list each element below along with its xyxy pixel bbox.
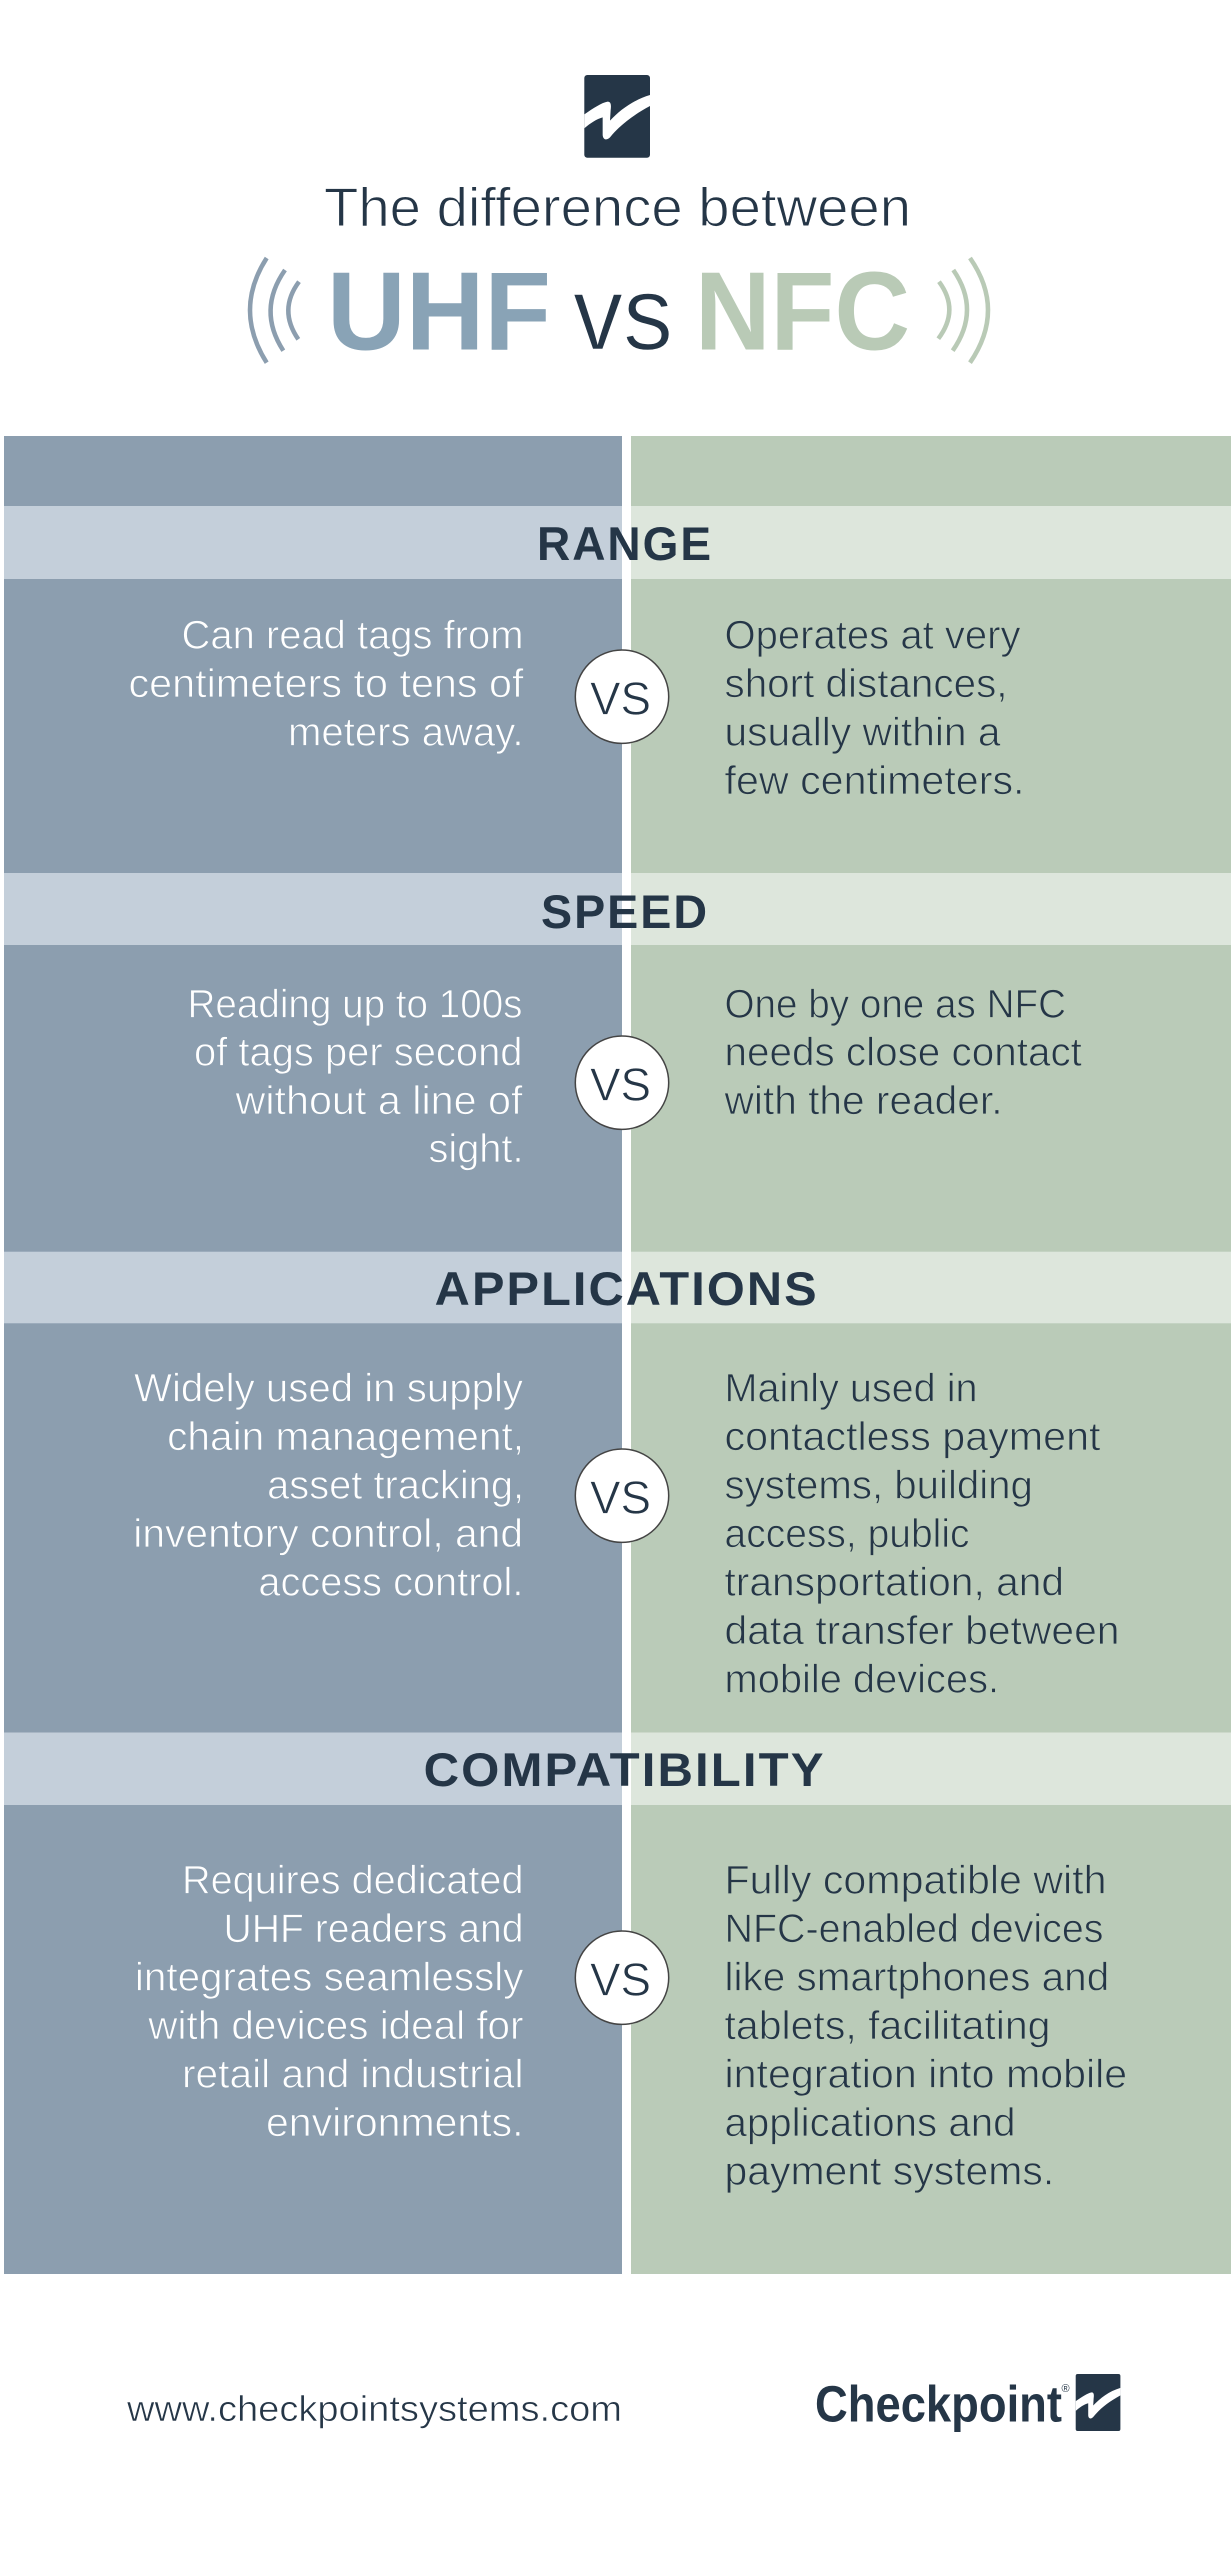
- header: [250, 75, 988, 373]
- text: NFC applications: data transfer between: [724, 1609, 1120, 1653]
- text: UHF speed: without a line of: [234, 1079, 523, 1123]
- text: UHF compatibility: environments.: [266, 2101, 524, 2145]
- text: NFC range: [724, 614, 1024, 803]
- footer: [126, 2374, 1120, 2433]
- text: UHF compatibility: retail and industrial: [182, 2052, 524, 2096]
- text: UHF compatibility: with devices ideal for: [147, 2004, 524, 2048]
- section: speed: [4, 873, 1231, 1171]
- heading band: speed: [4, 873, 1231, 945]
- heading band: range: RANGE: [537, 517, 713, 570]
- text: NFC applications: Mainly used in: [724, 1367, 978, 1411]
- text: NFC compatibility: Fully compatible with: [724, 1858, 1106, 1902]
- heading band: compatibility: [4, 1732, 1231, 1805]
- section: range: [4, 506, 1231, 803]
- text: NFC applications: systems, building: [724, 1464, 1033, 1508]
- vs badge: range: [575, 650, 669, 743]
- text: NFC applications: transportation, and: [724, 1560, 1064, 1604]
- text: UHF applications: [133, 1367, 524, 1604]
- vs badge: applications: [575, 1449, 669, 1542]
- checkpoint wordmark: Checkpoint: [815, 2376, 1062, 2433]
- text: UHF applications: chain management,: [167, 1415, 524, 1459]
- icon: right signal waves: [938, 258, 988, 363]
- text: NFC applications: [724, 1367, 1120, 1702]
- text: NFC speed: [723, 982, 1082, 1123]
- vs badge: speed: [575, 1036, 669, 1129]
- text: NFC compatibility: NFC-enabled devices: [724, 1907, 1104, 1951]
- icon: checkpoint logo small: [1076, 2374, 1120, 2431]
- text: NFC applications: contactless payment: [724, 1415, 1100, 1459]
- heading band: applications: [4, 1252, 1231, 1323]
- heading: vs: vs: [573, 255, 673, 372]
- text: NFC compatibility: applications and: [724, 2101, 1016, 2145]
- heading band: speed: SPEED: [541, 885, 709, 938]
- vs badge: compatibility: VS: [590, 1954, 651, 2006]
- text: NFC range: few centimeters.: [724, 759, 1024, 803]
- section: compatibility: [4, 1732, 1231, 2193]
- text: UHF applications: inventory control, and: [133, 1512, 523, 1556]
- checkpoint wordmark: ®: [1062, 2383, 1070, 2395]
- text: UHF range: Can read tags from: [182, 614, 524, 658]
- text: NFC compatibility: integration into mobile: [724, 2052, 1127, 2096]
- panel: NFC column background: [631, 436, 1231, 2274]
- text: UHF range: [128, 614, 524, 754]
- vs badge: range: VS: [590, 672, 651, 724]
- heading band: applications: APPLICATIONS: [435, 1262, 819, 1315]
- text: NFC applications: mobile devices.: [724, 1658, 999, 1702]
- text: NFC speed: with the reader.: [723, 1079, 1002, 1123]
- text: UHF applications: asset tracking,: [267, 1464, 524, 1508]
- website url: www.checkpointsystems.com: [126, 2388, 622, 2429]
- heading: NFC: NFC: [695, 249, 910, 373]
- vs badge: applications: VS: [590, 1472, 651, 1524]
- heading band: range: [4, 506, 1231, 579]
- vs badge: compatibility: [575, 1931, 669, 2024]
- text: NFC range: short distances,: [724, 662, 1008, 706]
- text: NFC speed: needs close contact: [724, 1031, 1082, 1075]
- text: UHF speed: [188, 982, 524, 1171]
- text: NFC range: Operates at very: [724, 614, 1020, 658]
- text: UHF range: centimeters to tens of: [128, 662, 524, 706]
- vs badge: speed: VS: [590, 1058, 651, 1110]
- section: applications: [4, 1252, 1231, 1702]
- text: UHF compatibility: UHF readers and: [224, 1907, 524, 1951]
- text: UHF range: meters away.: [288, 710, 524, 754]
- heading: UHF: UHF: [327, 249, 551, 373]
- text: UHF compatibility: [135, 1858, 524, 2145]
- text: UHF compatibility: integrates seamlessly: [135, 1955, 524, 1999]
- text: NFC compatibility: tablets, facilitating: [724, 2004, 1050, 2048]
- text: UHF applications: access control.: [258, 1560, 523, 1604]
- text: UHF speed: Reading up to 100s: [188, 982, 522, 1026]
- text: NFC compatibility: [724, 1858, 1127, 2193]
- icon: left signal waves: [250, 258, 299, 363]
- heading band: compatibility: COMPATIBILITY: [424, 1743, 826, 1796]
- text: NFC applications: access, public: [724, 1512, 970, 1556]
- panel: UHF column background: [4, 436, 622, 2274]
- text: NFC speed: One by one as NFC: [724, 982, 1066, 1026]
- title: The difference between: [324, 176, 911, 238]
- text: UHF applications: Widely used in supply: [134, 1367, 523, 1411]
- text: NFC compatibility: like smartphones and: [724, 1955, 1109, 1999]
- text: NFC range: usually within a: [724, 710, 1001, 754]
- text: NFC compatibility: payment systems.: [724, 2149, 1054, 2193]
- text: UHF compatibility: Requires dedicated: [182, 1858, 524, 1902]
- text: UHF speed: of tags per second: [194, 1031, 522, 1075]
- text: UHF speed: sight.: [428, 1127, 524, 1171]
- icon: checkpoint logo: [584, 75, 650, 158]
